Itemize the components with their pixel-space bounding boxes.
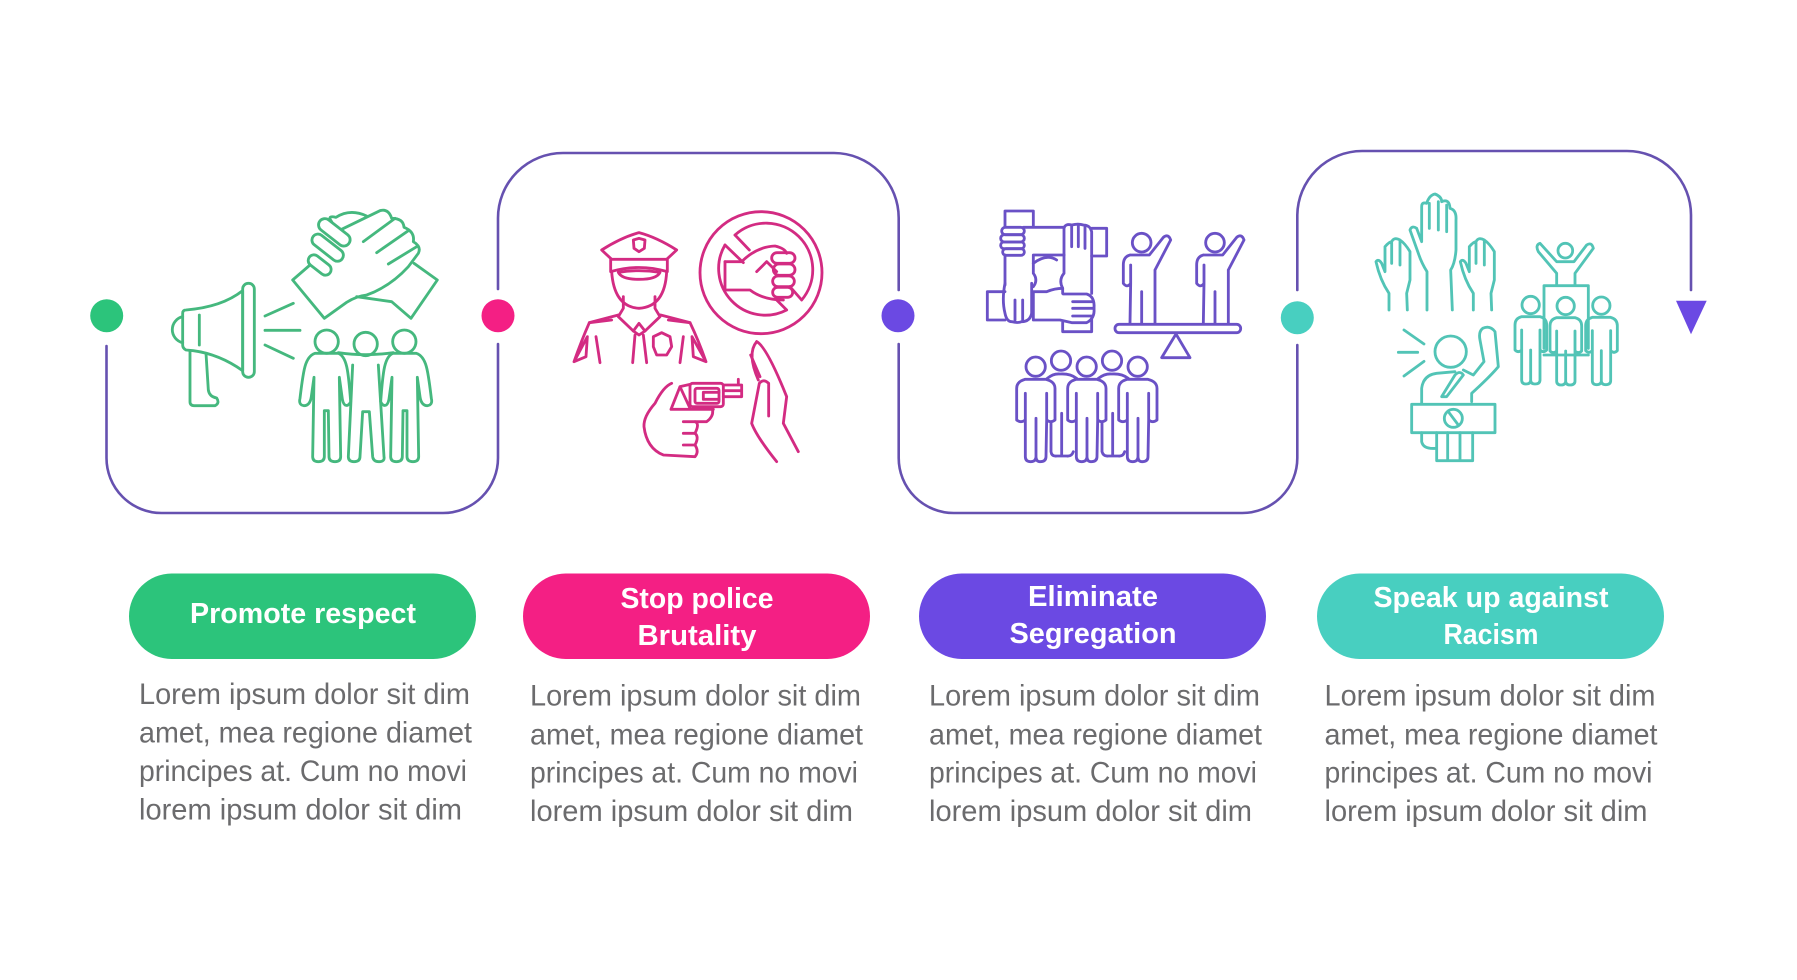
body text: column 1: Lorem ipsum dolor sit dim (139, 678, 470, 711)
step marker: purple dot (882, 299, 914, 332)
body text: column 1: amet, mea regione diamet (139, 717, 472, 750)
timeline connector line (106, 151, 1691, 513)
icon: four interlocked hands (987, 211, 1107, 332)
arrowhead (1676, 301, 1707, 334)
step marker: green dot (90, 299, 123, 332)
body text: column 3: principes at. Cum no movi (929, 757, 1257, 790)
body text: column 3 (929, 680, 1262, 828)
icon: raised hands (1376, 194, 1494, 310)
icon: clasped hands (293, 210, 437, 318)
body text: column 3: Lorem ipsum dolor sit dim (929, 680, 1260, 713)
icon group: stop police brutality (574, 212, 822, 462)
label pill: Speak up against Racism: Racism (1444, 619, 1538, 651)
label pill: Promote respect: Promote respect (190, 598, 417, 630)
icon: megaphone (172, 283, 300, 406)
label pill: Promote respect (129, 574, 476, 659)
icon: prohibited fist (700, 212, 822, 334)
body text: column 3: lorem ipsum dolor sit dim (929, 795, 1252, 828)
label pill: Stop police Brutality: Brutality (638, 620, 757, 652)
body text: column 2: Lorem ipsum dolor sit dim (530, 680, 861, 713)
icon group: eliminate segregation (987, 211, 1244, 462)
icon: balanced scale with two people (1115, 233, 1244, 358)
body text: column 1: principes at. Cum no movi (139, 755, 467, 788)
body text: column 2 (530, 680, 863, 828)
label pill: Eliminate Segregation (919, 574, 1266, 659)
body text: column 4: lorem ipsum dolor sit dim (1324, 795, 1648, 828)
label pill: Eliminate Segregation: Segregation (1010, 618, 1176, 650)
label pill: Stop police Brutality (523, 574, 870, 659)
label pill: Speak up against Racism (1317, 574, 1664, 659)
body text: column 4: Lorem ipsum dolor sit dim (1324, 680, 1656, 713)
body text: column 1: lorem ipsum dolor sit dim (139, 793, 462, 826)
label pill: Stop police Brutality: Stop police (620, 583, 774, 615)
icon: police officer (574, 233, 706, 363)
body text: column 3: amet, mea regione diamet (929, 718, 1262, 751)
label pill: Speak up against Racism: Speak up against (1374, 582, 1609, 614)
icon: hand holding revolver (644, 379, 742, 457)
body text: column 2: lorem ipsum dolor sit dim (530, 795, 853, 828)
icon: crowd of five people (1017, 351, 1157, 462)
label pill: Eliminate Segregation: Eliminate (1028, 581, 1158, 613)
body text: column 4: principes at. Cum no movi (1324, 757, 1652, 790)
icon group: promote respect (172, 210, 437, 462)
icon: speaker at podium (1398, 327, 1498, 461)
icon: three people embracing (300, 330, 432, 462)
body text: column 1 (139, 678, 472, 826)
body text: column 2: amet, mea regione diamet (530, 718, 863, 751)
icon: stop hand (751, 342, 798, 462)
icon: audience around leader (1515, 243, 1617, 385)
body text: column 4: amet, mea regione diamet (1324, 718, 1658, 751)
body text: column 2: principes at. Cum no movi (530, 757, 858, 790)
step marker: teal dot (1281, 301, 1314, 334)
step marker: pink dot (482, 299, 514, 332)
body text: column 4 (1324, 680, 1658, 828)
icon group: speak up against racism (1376, 194, 1617, 461)
